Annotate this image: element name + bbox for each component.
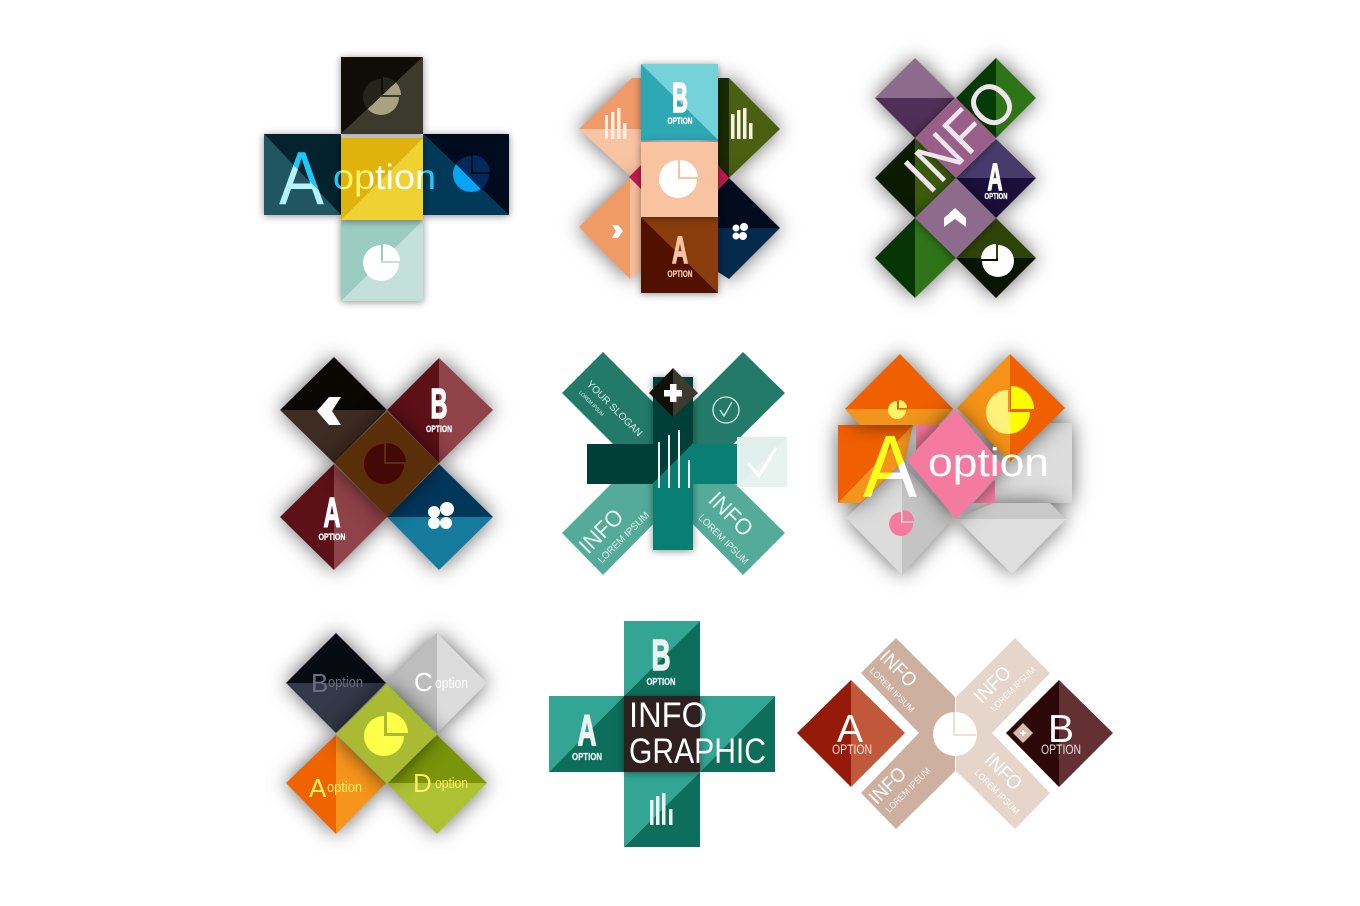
diamond: upper left peach bbox=[579, 78, 641, 187]
label: A option bbox=[668, 230, 692, 279]
label: B option: B bbox=[1048, 708, 1074, 751]
label: B option bbox=[668, 74, 692, 126]
text: info left: INFO bbox=[573, 503, 629, 559]
text: info top right bbox=[970, 662, 1037, 713]
diamond: centre pink bbox=[907, 409, 1005, 519]
text: info top left bbox=[868, 646, 921, 714]
accents: pink triangles bbox=[629, 165, 729, 190]
text: info bottom right: LOREM IPSUM bbox=[973, 768, 1021, 816]
diamond: bottom left maroon bbox=[280, 464, 387, 570]
bar: horizontal bbox=[587, 444, 737, 484]
label: A option: option bbox=[327, 779, 362, 796]
text: info top left: LOREM IPSUM bbox=[868, 666, 916, 714]
panel: beige X with two diamonds bbox=[797, 638, 1113, 829]
panel: infographic teal cross bbox=[549, 621, 775, 847]
diamond: top left purple bbox=[875, 58, 955, 138]
label: A option bbox=[832, 708, 872, 757]
tile: centre yellow square bbox=[341, 138, 423, 220]
panel: A option cross bbox=[264, 57, 509, 301]
tile: bottom brown square bbox=[641, 217, 718, 293]
text: info left bbox=[573, 503, 652, 566]
diamond: bottom left gray bbox=[846, 463, 953, 575]
label: D option: D bbox=[413, 768, 432, 798]
band: bottom right bbox=[673, 463, 785, 575]
label: C option: C bbox=[414, 667, 433, 697]
diamond: top right green bbox=[956, 58, 1036, 138]
word option: option bbox=[928, 441, 1049, 485]
icon: left chevron bbox=[317, 397, 341, 425]
tile: bottom bbox=[624, 772, 700, 847]
label: A option bbox=[984, 157, 1008, 201]
text: info right: LOREM IPSUM bbox=[696, 513, 750, 567]
diamond: A option orange bbox=[286, 735, 386, 834]
label: B option bbox=[646, 631, 676, 688]
text: your slogan: LOREM IPSUM bbox=[577, 390, 605, 418]
letter A: A bbox=[863, 417, 917, 516]
icon: big yellow pie bbox=[986, 386, 1034, 434]
title: INFO GRAPHIC bbox=[629, 696, 766, 771]
text: info bottom right: INFO bbox=[980, 749, 1026, 795]
band: top right bbox=[673, 352, 785, 463]
panel: four diamonds brown bbox=[280, 357, 493, 570]
panel: A option pink orange gray bbox=[838, 354, 1072, 575]
icon: centre white pie bbox=[933, 712, 977, 756]
tile: right navy square bbox=[423, 134, 509, 215]
label: B option: OPTION bbox=[668, 116, 692, 126]
word option: option bbox=[333, 158, 436, 197]
icon: top pie chart bbox=[363, 77, 401, 115]
diamond: B option dark bbox=[286, 633, 386, 733]
icon: check circle bbox=[713, 397, 739, 423]
diamond: centre olive bbox=[336, 684, 437, 784]
text: info bottom left: INFO bbox=[865, 763, 911, 809]
diamond: top right maroon bbox=[387, 358, 493, 463]
label: D option: option bbox=[435, 775, 468, 792]
diamond: upper right olive bbox=[718, 78, 780, 178]
panel: teal X with bars bbox=[562, 352, 787, 575]
label: A option: OPTION bbox=[572, 752, 602, 763]
diamond: centre pink bbox=[915, 98, 996, 178]
text: info right bbox=[696, 486, 759, 567]
icon: four dots bbox=[428, 502, 454, 529]
diamond: C option gray bbox=[387, 633, 487, 733]
block: left orange bbox=[838, 425, 913, 503]
text: info top left: INFO bbox=[875, 646, 921, 692]
word INFO: INFO bbox=[892, 67, 1030, 205]
diamond: centre brown bbox=[334, 411, 439, 517]
diamond: bottom right gray bbox=[957, 503, 1066, 574]
label: A option: A bbox=[672, 230, 688, 272]
label: B option bbox=[426, 380, 452, 435]
text: info bottom left bbox=[865, 763, 932, 814]
label: B option bbox=[1041, 708, 1081, 757]
text: info bottom left: LOREM IPSUM bbox=[884, 766, 932, 814]
diamond: A red bbox=[797, 680, 905, 787]
tile: centre dark square bbox=[624, 696, 700, 772]
icon: small yellow pie bbox=[888, 400, 907, 419]
label: B option: B bbox=[311, 668, 328, 698]
icon: four dots bbox=[732, 223, 748, 240]
icon: chevron right bbox=[612, 225, 623, 238]
label: A option: OPTION bbox=[668, 269, 692, 279]
chart: bars bbox=[650, 793, 672, 825]
band: bottom left bbox=[562, 463, 673, 575]
label: A option: A bbox=[837, 708, 863, 751]
tile: top teal square bbox=[641, 64, 718, 140]
label: A option: OPTION bbox=[318, 532, 346, 543]
diamond: D option olive bbox=[387, 735, 487, 834]
block: right gray bbox=[993, 423, 1072, 503]
tile: bottom mint square bbox=[341, 220, 423, 301]
text: info top right: INFO bbox=[970, 662, 1016, 708]
label: A option: A bbox=[988, 157, 1002, 199]
icon: small plus diamond bbox=[1013, 723, 1033, 743]
diamond: top right orange bbox=[957, 354, 1065, 462]
diamond: lower left orange bbox=[579, 178, 641, 279]
block: pink backing bbox=[916, 425, 995, 503]
band: top left bbox=[562, 352, 673, 463]
label: B option: option bbox=[328, 674, 363, 691]
panel: B and A option column bbox=[579, 64, 780, 293]
icon: yellow pie bbox=[364, 712, 408, 756]
label: B option: OPTION bbox=[1041, 741, 1081, 757]
label: C option: option bbox=[435, 675, 468, 692]
title: INFO GRAPHIC: GRAPHIC bbox=[629, 732, 766, 771]
label: A option: A bbox=[309, 773, 327, 803]
label: B option: OPTION bbox=[426, 424, 452, 435]
diamond: top left black bbox=[280, 357, 387, 463]
tile: light check square bbox=[737, 437, 787, 487]
icon: pink pie bbox=[889, 510, 914, 536]
diamond: B dark maroon bbox=[1006, 680, 1113, 787]
chevron: left tan bbox=[861, 638, 955, 829]
tile: top bbox=[624, 621, 700, 696]
diamond: bottom right blue bbox=[387, 464, 493, 570]
label: B option bbox=[311, 668, 363, 698]
icon: centre pie bbox=[364, 443, 406, 484]
tile: top dark square bbox=[341, 57, 423, 134]
icon: bottom white pie chart bbox=[363, 244, 400, 281]
label: A option: A bbox=[324, 489, 340, 536]
text: info bottom right bbox=[973, 749, 1026, 816]
icon: plus diamond bbox=[649, 368, 698, 417]
label: B option: B bbox=[430, 380, 448, 427]
diamond: top left orange bbox=[845, 354, 953, 425]
tile: left teal square bbox=[264, 134, 341, 215]
letter A: A bbox=[279, 136, 324, 220]
label: B option: B bbox=[652, 631, 670, 680]
diamond: lower right navy bbox=[718, 178, 780, 279]
diamond: middle left dark green bbox=[875, 138, 956, 218]
icon: white pie bbox=[981, 244, 1014, 277]
panel: INFO diamond stack bbox=[875, 58, 1036, 298]
chart: centre bars bbox=[658, 430, 690, 488]
diamond: lower centre mauve bbox=[915, 178, 996, 258]
label: A option bbox=[318, 489, 346, 543]
title: INFO GRAPHIC: INFO bbox=[629, 696, 707, 735]
chevron: right light bbox=[956, 638, 1050, 829]
label: A option: OPTION bbox=[832, 741, 872, 757]
diamond: bottom right olive bbox=[956, 218, 1036, 298]
tile: centre peach square bbox=[641, 142, 718, 217]
label: A option: OPTION bbox=[984, 191, 1008, 201]
label: B option: B bbox=[672, 74, 688, 121]
icon: up chevron bbox=[944, 208, 966, 227]
text: info top right: LOREM IPSUM bbox=[989, 665, 1037, 713]
label: C option bbox=[414, 667, 468, 697]
bar: vertical bbox=[653, 377, 693, 550]
diamond: bottom left green bbox=[875, 218, 956, 298]
label: B option: OPTION bbox=[646, 677, 676, 688]
tile: left bbox=[549, 696, 624, 772]
icon: upper left bars bbox=[605, 108, 626, 139]
text: info right: INFO bbox=[703, 486, 759, 542]
diamond: middle right indigo bbox=[956, 139, 1036, 218]
icon: upper right bars bbox=[731, 108, 752, 139]
panel: four options diamonds bbox=[286, 633, 487, 834]
text: info left: LOREM IPSUM bbox=[596, 510, 652, 566]
label: A option bbox=[572, 706, 602, 763]
text: your slogan: YOUR SLOGAN bbox=[584, 379, 644, 439]
icon: centre white pie bbox=[659, 160, 698, 198]
icon: right pie chart bbox=[453, 155, 490, 192]
label: D option bbox=[413, 768, 468, 798]
label: A option: A bbox=[578, 706, 596, 755]
tile: right bbox=[700, 696, 775, 772]
label: A option bbox=[309, 773, 362, 803]
